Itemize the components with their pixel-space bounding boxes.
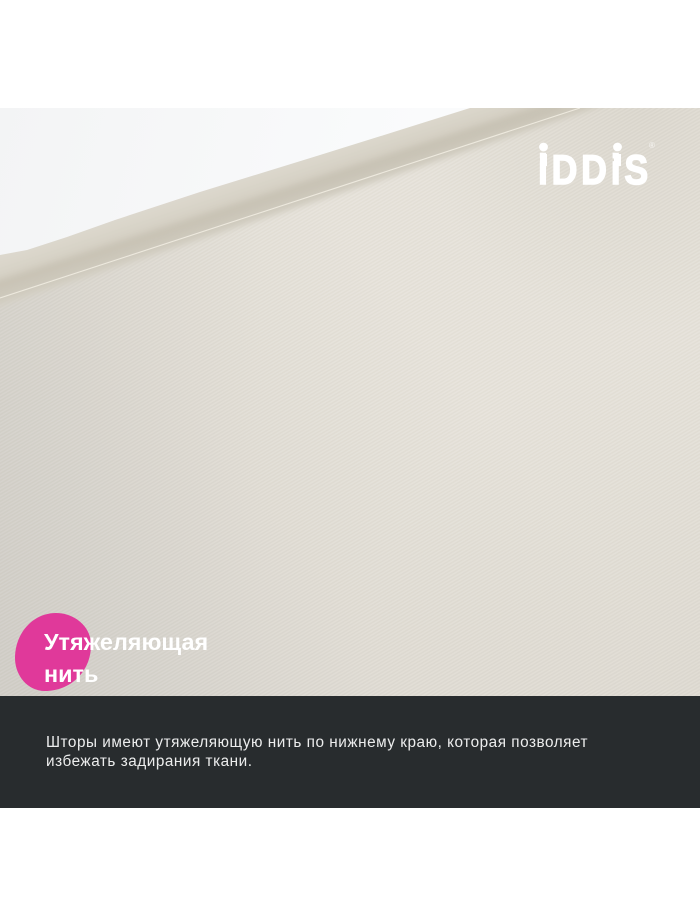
body text: Шторы имеют утяжеляющую нить по нижнему краю, которая позволяет — [46, 734, 588, 751]
fabric surface — [0, 108, 700, 696]
rolled hem — [0, 100, 620, 316]
body text — [46, 734, 588, 770]
logo: iDDiS: ® — [649, 141, 655, 150]
background behind the curtain — [0, 100, 480, 255]
heading: нить — [44, 661, 98, 687]
stitch line — [0, 108, 580, 298]
logo: iDDiS: iDDiS — [538, 146, 652, 193]
body text: избежать задирания ткани. — [46, 753, 253, 770]
heading: Утяжеляющая — [44, 629, 208, 655]
pink blob — [15, 613, 91, 691]
dark caption band — [0, 696, 700, 808]
heading — [44, 629, 208, 687]
photo: beige fabric with weighted hem — [0, 108, 700, 696]
